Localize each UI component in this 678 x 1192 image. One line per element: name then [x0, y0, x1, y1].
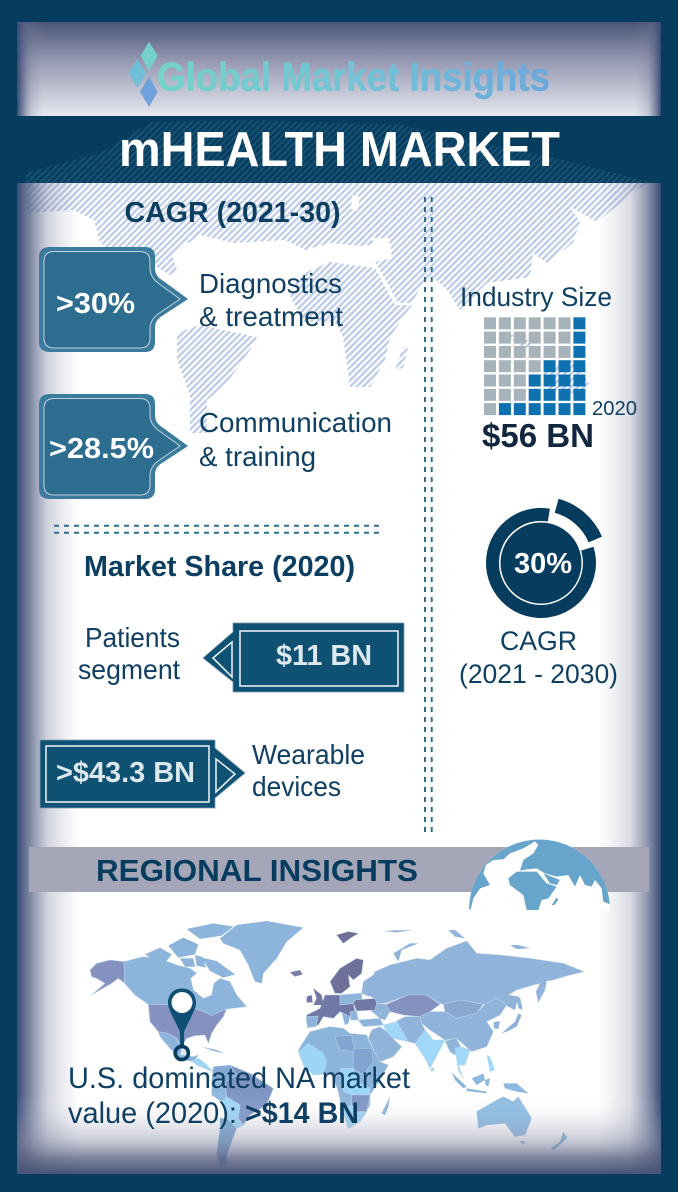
title bar	[17, 116, 661, 183]
edge shading: top section	[17, 22, 661, 116]
logo diamonds	[129, 42, 158, 107]
value: 30%	[514, 548, 572, 580]
title: mHEALTH MARKET	[119, 123, 560, 177]
label: patients segment: segment	[78, 654, 180, 685]
heading: CAGR: CAGR (2021-30)	[124, 197, 340, 229]
map: americas	[90, 921, 303, 1165]
label: patients segment: Patients	[85, 622, 180, 653]
logo	[129, 42, 550, 107]
logo wordmark: Global Market Insights	[157, 56, 550, 100]
heading: regional insights: REGIONAL INSIGHTS	[96, 853, 418, 888]
label: CAGR period: (2021 - 2030)	[459, 659, 618, 689]
text: U.S. market value: >$14 BN	[245, 1097, 359, 1130]
waffle chart: industry size	[484, 317, 585, 415]
edge shading: lower section	[17, 183, 661, 1174]
label: industry size: Industry Size	[460, 282, 612, 312]
hatched background world map	[26, 120, 650, 433]
map: eurasia, africa, oceania	[298, 930, 584, 1150]
tag: >$43.3 BN	[40, 740, 245, 808]
label: wearable devices: Wearable	[252, 739, 365, 770]
heading: market share: Market Share (2020)	[84, 551, 355, 583]
value: >30%	[56, 288, 135, 320]
label: communication: & training	[199, 441, 316, 472]
band: regional insights	[29, 847, 649, 892]
label: wearable devices: devices	[252, 771, 341, 802]
donut chart: 30% CAGR	[486, 499, 602, 618]
label: diagnostics: Diagnostics	[199, 268, 342, 299]
icon: globe	[469, 840, 610, 910]
map pin	[168, 988, 196, 1060]
label: year: 2020	[592, 398, 637, 420]
callout: communication	[39, 394, 188, 499]
value: >$43.3 BN	[56, 757, 195, 789]
value: >28.5%	[49, 433, 154, 465]
text: U.S. market value: value (2020):	[68, 1097, 245, 1130]
label: diagnostics: & treatment	[199, 301, 343, 332]
value: $11 BN	[276, 639, 372, 671]
tag: $11 BN	[203, 623, 404, 692]
text: U.S. market value: U.S. dominated NA market	[68, 1062, 410, 1095]
label: communication: Communication	[199, 407, 392, 438]
regional world map	[90, 921, 584, 1165]
label: CAGR period: CAGR	[500, 626, 577, 656]
callout: diagnostics	[39, 247, 188, 352]
value: $56 BN: $56 BN	[482, 417, 594, 454]
